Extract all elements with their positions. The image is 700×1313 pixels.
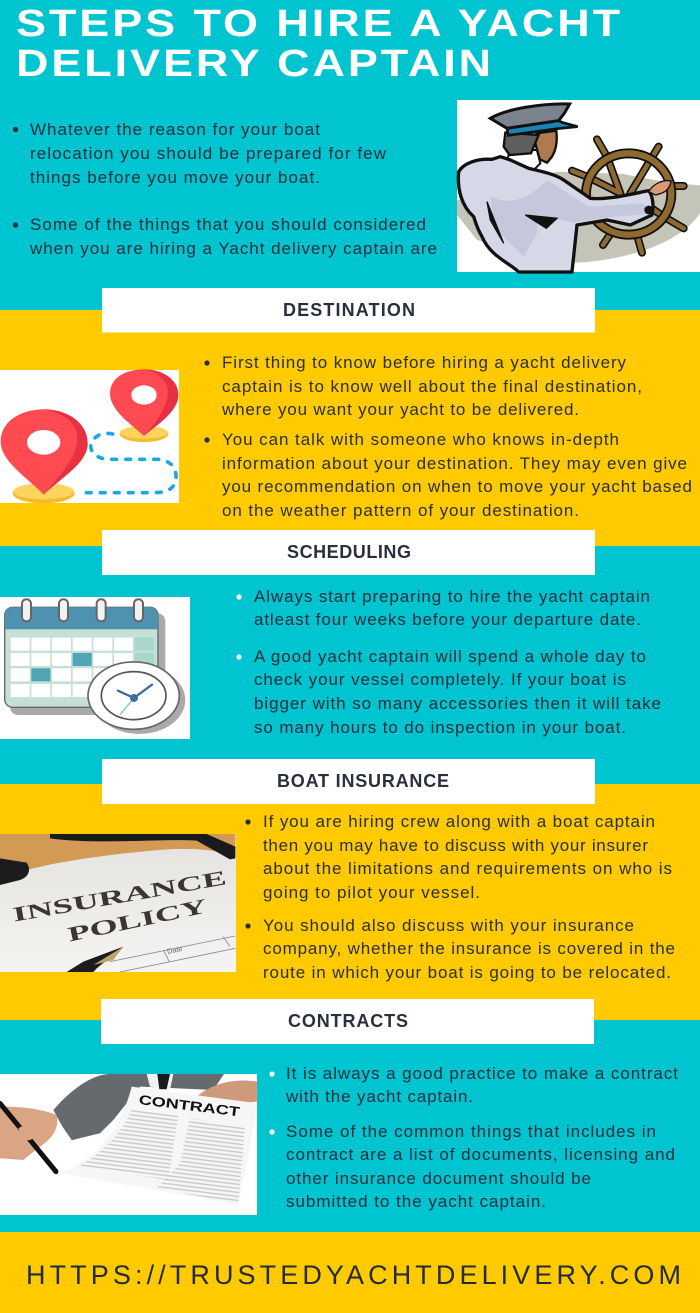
image: insurance policy document: Date: [166, 944, 183, 956]
text block: destination: captain is to know well about the final destination,: [222, 377, 642, 396]
intro text block: relocation you should be prepared for few: [30, 144, 387, 163]
text block: contracts: [269, 1064, 678, 1211]
icon: captain at ship wheel: [457, 100, 700, 272]
title: DELIVERY CAPTAIN: [16, 43, 494, 85]
text block: boat insurance: company, whether the insurance is covered in the: [263, 939, 675, 958]
intro text block: [13, 120, 437, 258]
heading: scheduling: [102, 530, 595, 575]
text block: contracts: contract are a list of documents, licensing and: [286, 1145, 675, 1164]
text block: destination: where you want your yacht to be delivered.: [221, 400, 579, 419]
intro text block: Whatever the reason for your boat: [30, 120, 320, 139]
text block: boat insurance: about the limitations and requirements on who is: [263, 859, 672, 878]
text block: boat insurance: You should also discuss with your insurance: [263, 916, 634, 935]
footer url: HTTPS://TRUSTEDYACHTDELIVERY.COM: [26, 1260, 681, 1290]
text block: scheduling: Always start preparing to hire the yacht captain: [254, 587, 650, 606]
text block: contracts: with the yacht captain.: [285, 1087, 473, 1106]
text block: scheduling: [236, 587, 661, 737]
text block: boat insurance: [245, 812, 675, 982]
title: [16, 3, 623, 85]
icon: calendar and clock: [0, 597, 190, 739]
heading: destination: [102, 288, 595, 332]
image: insurance policy document: INSURANCE: [11, 867, 228, 927]
intro text block: things before you move your boat.: [30, 168, 320, 187]
text block: scheduling: so many hours to do inspection in your boat.: [254, 718, 626, 737]
text block: boat insurance: then you may have to discuss with your insurer: [263, 836, 648, 855]
text block: destination: [204, 353, 692, 520]
text block: destination: You can talk with someone who knows in-depth: [222, 430, 619, 449]
text block: destination: on the weather pattern of your destination.: [222, 501, 579, 520]
text block: destination: information about your destination. They may even give: [222, 454, 687, 473]
text block: contracts: It is always a good practice to make a contract: [286, 1064, 678, 1083]
heading: destination: DESTINATION: [283, 300, 415, 320]
image: insurance policy document: POLICY: [66, 896, 209, 947]
image: signing a contract: CONTRACT: [138, 1092, 241, 1119]
heading: contracts: [101, 999, 594, 1044]
heading: scheduling: SCHEDULING: [287, 542, 411, 562]
text block: destination: you recommendation on when to move your yacht based: [222, 477, 692, 496]
icon: map pins with dotted route: [0, 369, 179, 503]
text block: scheduling: bigger with so many accessories then it will take: [254, 694, 661, 713]
text block: scheduling: check your vessel completely. If your boat is: [254, 670, 626, 689]
text block: scheduling: A good yacht captain will spend a whole day to: [254, 647, 646, 666]
text block: contracts: other insurance document should be: [286, 1169, 591, 1188]
image: insurance policy document: [0, 834, 236, 972]
text block: scheduling: atleast four weeks before your departure date.: [254, 610, 641, 629]
text block: boat insurance: If you are hiring crew along with a boat captain: [263, 812, 655, 831]
text block: destination: First thing to know before hiring a yacht delivery: [222, 353, 626, 372]
text block: boat insurance: going to pilot your vessel.: [263, 883, 480, 902]
heading: boat insurance: BOAT INSURANCE: [277, 771, 449, 791]
text block: contracts: Some of the common things that includes in: [286, 1122, 656, 1141]
text block: contracts: submitted to the yacht captain.: [286, 1192, 546, 1211]
image: signing a contract: [0, 1074, 257, 1215]
intro text block: Some of the things that you should considered: [30, 215, 426, 234]
heading: boat insurance: [102, 759, 595, 804]
intro text block: when you are hiring a Yacht delivery captain are: [29, 239, 437, 258]
heading: contracts: CONTRACTS: [288, 1011, 408, 1031]
title: STEPS TO HIRE A YACHT: [16, 3, 623, 45]
text block: boat insurance: route in which your boat is going to be relocated.: [263, 963, 671, 982]
